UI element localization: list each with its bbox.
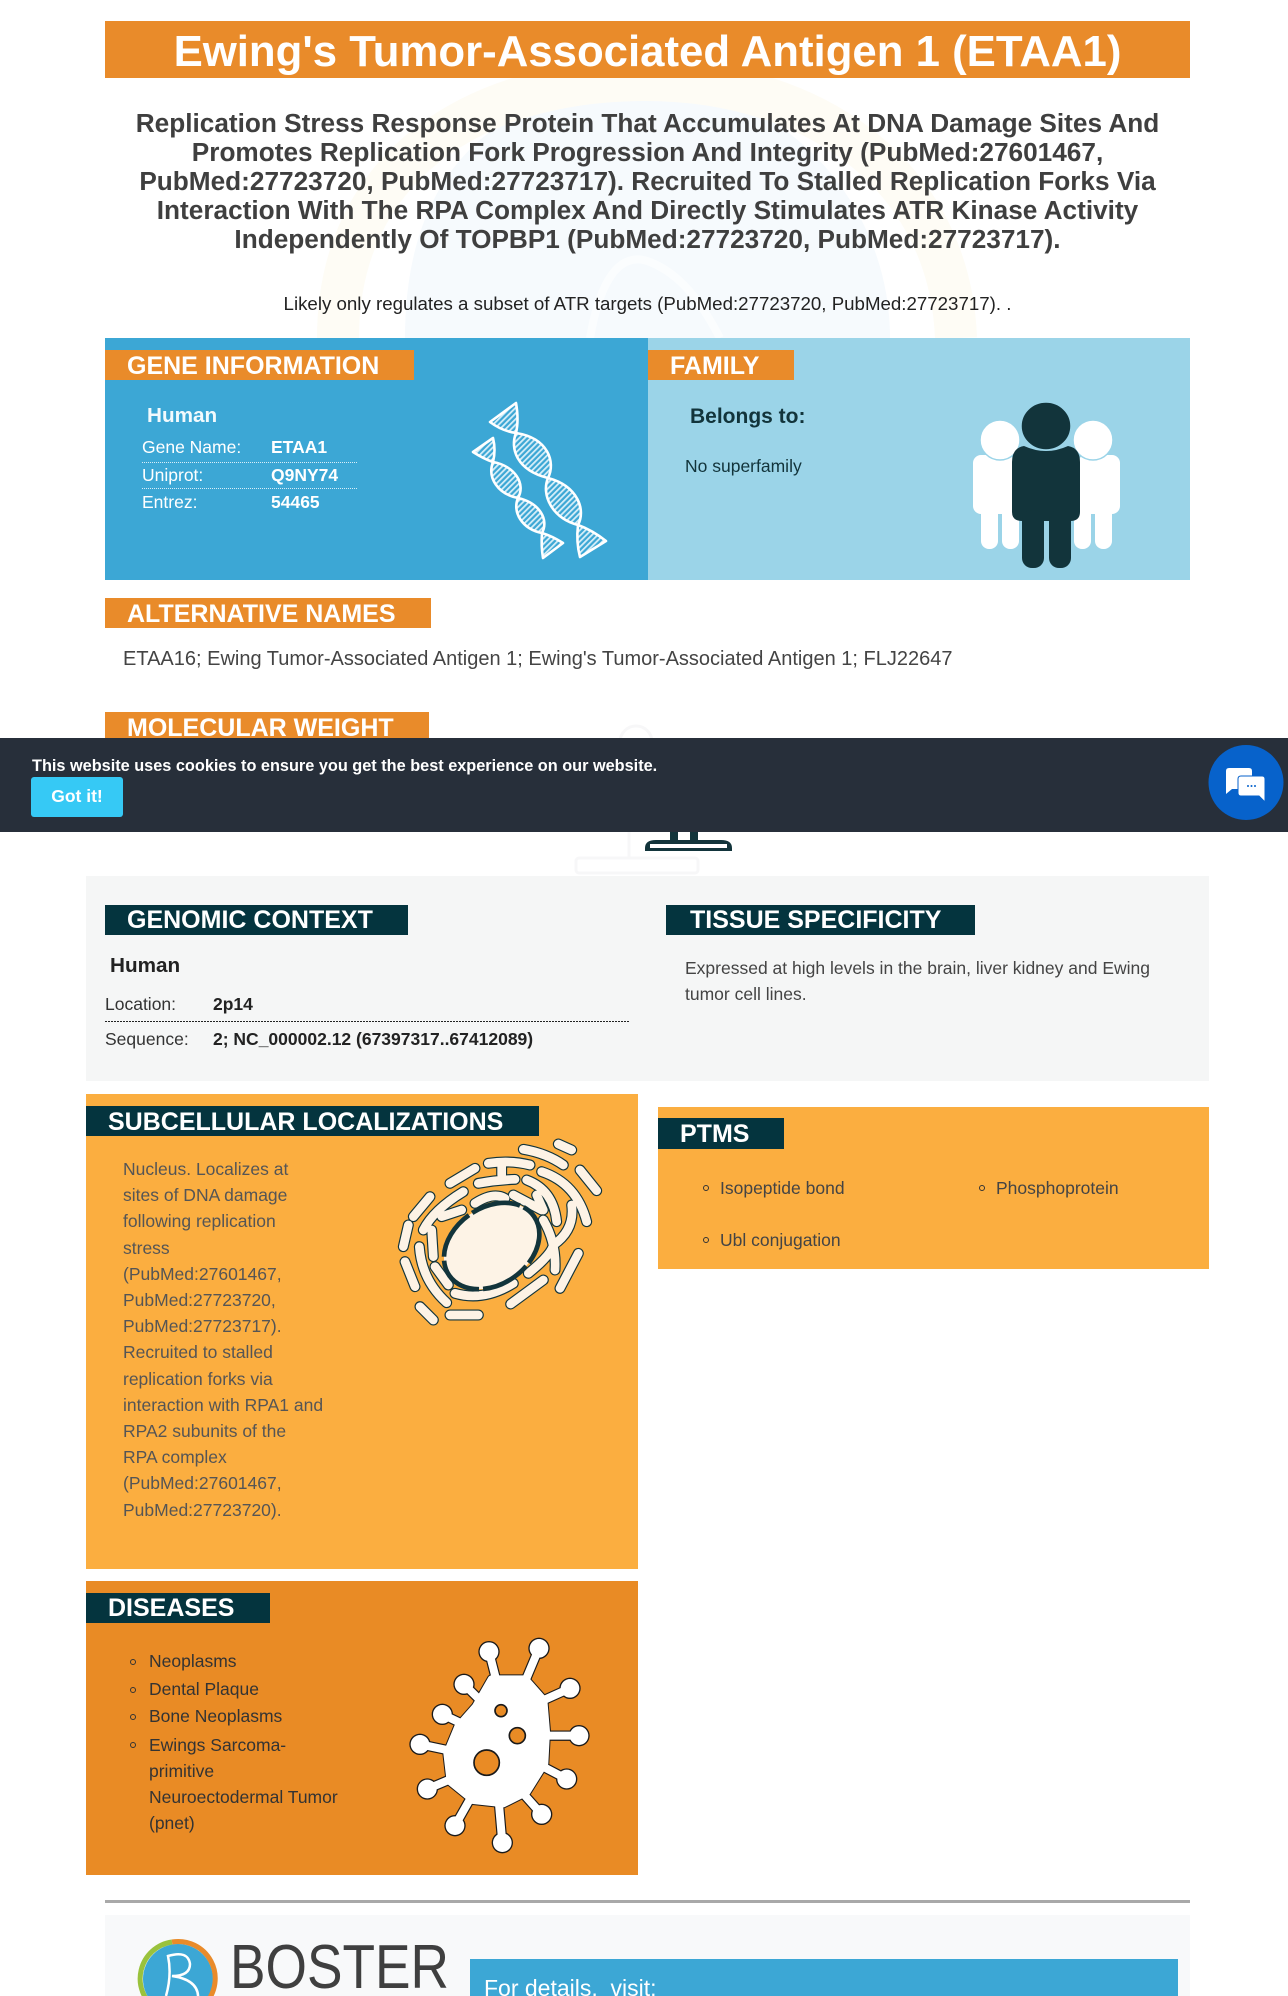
- panel: subcellular localizations: [86, 1094, 638, 1569]
- localization text: PubMed:27723717).: [123, 1316, 282, 1336]
- cookie banner: [0, 738, 1288, 832]
- gene table: ETAA1: [271, 437, 327, 457]
- localization text: PubMed:27723720).: [123, 1500, 282, 1520]
- PTM list: [703, 1178, 1119, 1250]
- disease list: primitive: [149, 1761, 214, 1781]
- localization text: Nucleus. Localizes at: [123, 1159, 288, 1179]
- heading: gene information: GENE INFORMATION: [127, 352, 379, 380]
- description: [136, 108, 1159, 254]
- gene table: 54465: [271, 492, 320, 512]
- heading: diseases: [86, 1593, 270, 1623]
- PTM list: Isopeptide bond: [720, 1178, 845, 1198]
- description: Independently Of TOPBP1 (PubMed:27723720, PubMed:27723717).: [234, 224, 1061, 254]
- gene table: Entrez:: [142, 492, 197, 512]
- callout: for details: [470, 1959, 1178, 1996]
- localization text: interaction with RPA1 and: [123, 1395, 323, 1415]
- heading: alternative names: ALTERNATIVE NAMES: [127, 600, 396, 628]
- genomic table: Sequence:: [105, 1029, 189, 1049]
- secondary description: Likely only regulates a subset of ATR targets (PubMed:27723720, PubMed:27723717). .: [284, 293, 1011, 314]
- localization text: (PubMed:27601467,: [123, 1473, 282, 1493]
- heading: PTMs: PTMS: [680, 1120, 749, 1148]
- disease list: (pnet): [149, 1813, 195, 1833]
- panel: family: [648, 338, 1190, 580]
- disease list: Neuroectodermal Tumor: [149, 1787, 338, 1807]
- description: Promotes Replication Fork Progression And Integrity (PubMed:27601467,: [192, 137, 1103, 167]
- heading: subcellular localizations: SUBCELLULAR LOCALIZATIONS: [108, 1108, 503, 1136]
- heading: family: FAMILY: [670, 352, 759, 380]
- panel: genomic context and tissue specificity: [86, 876, 1209, 1081]
- cookie text: This website uses cookies to ensure you get the best experience on our website.: [32, 757, 657, 775]
- gene table: Gene Name:: [142, 437, 241, 457]
- title: Ewing's Tumor-Associated Antigen 1 (ETAA1): [174, 27, 1121, 76]
- tissue text: tumor cell lines.: [685, 984, 807, 1004]
- belongs to label: Belongs to:: [690, 405, 806, 428]
- heading: diseases: DISEASES: [108, 1594, 234, 1622]
- disease list: Bone Neoplasms: [149, 1706, 282, 1726]
- icon: people: [973, 402, 1120, 568]
- button: got it: [31, 777, 123, 817]
- heading: PTMs: [658, 1118, 784, 1149]
- icon: chat: [1208, 745, 1284, 820]
- disease list: [130, 1651, 338, 1833]
- heading: family: [648, 350, 794, 380]
- localization text: RPA2 subunits of the: [123, 1421, 286, 1441]
- disease list: Neoplasms: [149, 1651, 237, 1671]
- species label: Human: [110, 954, 180, 977]
- tissue text: Expressed at high levels in the brain, liver kidney and Ewing: [685, 958, 1150, 978]
- disease list: Dental Plaque: [149, 1679, 259, 1699]
- genomic table: [105, 994, 629, 1049]
- genomic table: 2p14: [213, 994, 253, 1014]
- panel: PTMs: [658, 1107, 1209, 1269]
- gene table: [142, 437, 357, 512]
- genomic table: 2; NC_000002.12 (67397317..67412089): [213, 1029, 533, 1049]
- background watermark: logo: [317, 78, 977, 338]
- panel: gene information: [105, 338, 648, 580]
- localization text: following replication: [123, 1211, 276, 1231]
- alternative names text: ETAA16; Ewing Tumor-Associated Antigen 1; Ewing's Tumor-Associated Antigen 1; FLJ22647: [123, 648, 952, 670]
- description: Interaction With The RPA Complex And Directly Stimulates ATR Kinase Activity: [157, 195, 1138, 225]
- PTM list: Ubl conjugation: [720, 1230, 841, 1250]
- disease list: Ewings Sarcoma-: [149, 1735, 286, 1755]
- localization text: sites of DNA damage: [123, 1185, 287, 1205]
- localization text: RPA complex: [123, 1447, 227, 1467]
- icon: virus: [409, 1638, 590, 1854]
- heading: tissue specificity: TISSUE SPECIFICITY: [690, 906, 941, 934]
- logo: Boster: [138, 1933, 449, 1996]
- description: PubMed:27723720, PubMed:27723717). Recruited To Stalled Replication Forks Via: [139, 166, 1156, 196]
- localization text: replication forks via: [123, 1369, 273, 1389]
- localization text: [123, 1159, 323, 1520]
- species label: Human: [147, 404, 217, 427]
- panel: diseases: [86, 1581, 638, 1875]
- panel: footer: [105, 1915, 1190, 1996]
- localization text: Recruited to stalled: [123, 1342, 273, 1362]
- icon: DNA: [472, 402, 608, 560]
- tissue text: [685, 958, 1150, 1004]
- divider rule: [105, 1900, 1190, 1903]
- icon: faint scale: [645, 832, 732, 851]
- localization text: (PubMed:27601467,: [123, 1264, 282, 1284]
- icon: cell: [398, 1138, 602, 1326]
- description: Replication Stress Response Protein That Accumulates At DNA Damage Sites And: [136, 108, 1159, 138]
- gene table: Uniprot:: [142, 465, 203, 485]
- localization text: stress: [123, 1238, 170, 1258]
- genomic table: Location:: [105, 994, 176, 1014]
- heading: molecular weight: MOLECULAR WEIGHT: [127, 714, 394, 742]
- localization text: PubMed:27723720,: [123, 1290, 276, 1310]
- button: got it: Got it!: [51, 786, 103, 806]
- heading: genomic context: GENOMIC CONTEXT: [127, 906, 373, 934]
- family value: No superfamily: [685, 456, 802, 476]
- gene table: Q9NY74: [271, 465, 338, 485]
- panel: PTMs: Phosphoprotein: [996, 1178, 1119, 1198]
